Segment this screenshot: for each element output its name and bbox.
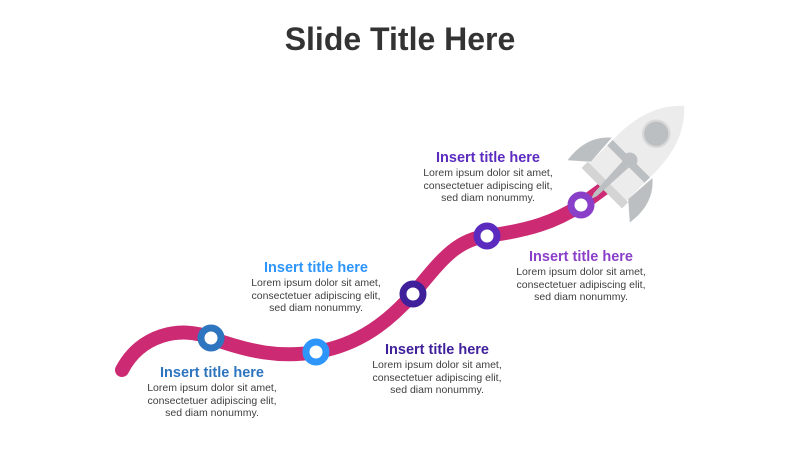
marker 4 (477, 226, 497, 246)
text block 2: Insert title here (264, 260, 368, 276)
marker 2 (306, 342, 326, 362)
text block 3: Lorem ipsum dolor sit amet, (372, 359, 502, 371)
text block 2: consectetuer adipiscing elit, (252, 290, 380, 302)
text block 1: consectetuer adipiscing elit, (148, 394, 276, 406)
icon: rocket (559, 74, 716, 231)
text block 5: Lorem ipsum dolor sit amet, (516, 266, 646, 278)
text block 5: sed diam nonummy. (534, 291, 628, 303)
text block 5 (516, 249, 646, 303)
text block 2: sed diam nonummy. (269, 302, 363, 314)
text block 1 (147, 365, 277, 419)
text block 2: Lorem ipsum dolor sit amet, (251, 277, 381, 289)
text block 3 (372, 342, 502, 396)
text block 1: Insert title here (160, 365, 264, 381)
marker 5 (571, 195, 591, 215)
text block 3: consectetuer adipiscing elit, (372, 372, 502, 384)
text block 3: Insert title here (385, 342, 489, 358)
path (122, 178, 618, 370)
text block 1: sed diam nonummy. (165, 407, 259, 419)
text block 2 (251, 260, 381, 314)
title: Slide Title Here (285, 21, 515, 57)
text block 4: consectetuer adipiscing elit, (424, 180, 552, 192)
text block 4: Lorem ipsum dolor sit amet, (423, 167, 553, 179)
text block 1: Lorem ipsum dolor sit amet, (147, 382, 277, 394)
text block 5: Insert title here (529, 249, 633, 265)
text block 4 (423, 150, 553, 204)
text block 4: Insert title here (436, 150, 540, 166)
text block 3: sed diam nonummy. (390, 384, 484, 396)
marker 1 (201, 328, 221, 348)
text block 4: sed diam nonummy. (441, 192, 535, 204)
text block 5: consectetuer adipiscing elit, (516, 278, 646, 290)
marker 3 (403, 284, 423, 304)
